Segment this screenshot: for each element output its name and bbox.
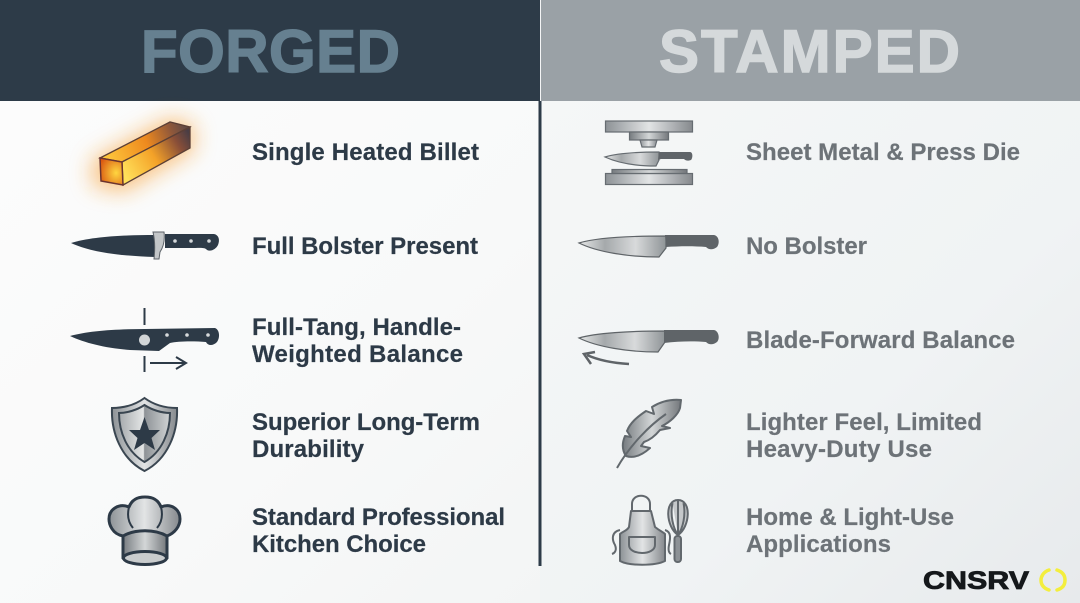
title: STAMPED: STAMPED xyxy=(659,18,960,85)
icon: press die xyxy=(605,121,692,184)
icon: shield with star xyxy=(112,398,177,471)
icon: full-tang balance knife xyxy=(70,308,219,372)
icon: heated billet xyxy=(92,118,194,192)
icon: stamped knife without bolster xyxy=(579,235,719,257)
icon: logo ring xyxy=(1041,570,1065,590)
label: durability: Superior Long-Term xyxy=(252,409,480,436)
label: single heated billet: Single Heated Billet xyxy=(252,139,479,166)
center divider xyxy=(538,101,542,566)
label: sheet metal & press die: Sheet Metal & Press Die xyxy=(746,139,1020,166)
label: home & light-use: Home & Light-Use xyxy=(746,504,954,531)
label: home & light-use: Applications xyxy=(746,531,891,558)
icon: feather xyxy=(617,400,681,468)
label: lighter feel: Lighter Feel, Limited xyxy=(746,409,982,436)
label: professional kitchen: Kitchen Choice xyxy=(252,531,426,558)
icon: apron and whisk xyxy=(612,496,688,565)
icon: forged knife with bolster xyxy=(71,232,219,259)
label: lighter feel xyxy=(746,409,982,463)
label: durability: Durability xyxy=(252,436,365,463)
title: FORGED: FORGED xyxy=(141,18,400,85)
label: durability xyxy=(252,409,480,463)
label: full-tang balance: Weighted Balance xyxy=(252,341,463,368)
logo: CNSRV xyxy=(923,567,1065,595)
logo: CNSRV: CNSRV xyxy=(923,567,1029,595)
panel: stamped rows xyxy=(579,121,1020,565)
label: home & light-use xyxy=(746,504,954,558)
label: no bolster: No Bolster xyxy=(746,233,867,260)
label: blade-forward balance: Blade-Forward Balance xyxy=(746,327,1015,354)
header: forged xyxy=(0,0,540,101)
label: professional kitchen: Standard Professional xyxy=(252,504,505,531)
label: lighter feel: Heavy-Duty Use xyxy=(746,436,932,463)
label: full bolster present: Full Bolster Present xyxy=(252,233,478,260)
label: full-tang balance xyxy=(252,314,463,368)
label: full-tang balance: Full-Tang, Handle- xyxy=(252,314,461,341)
icon: blade-forward balance knife xyxy=(579,330,719,364)
label: professional kitchen xyxy=(252,504,505,558)
icon: chef hat xyxy=(109,497,180,564)
panel: forged rows xyxy=(70,118,505,564)
header: stamped xyxy=(541,0,1080,101)
